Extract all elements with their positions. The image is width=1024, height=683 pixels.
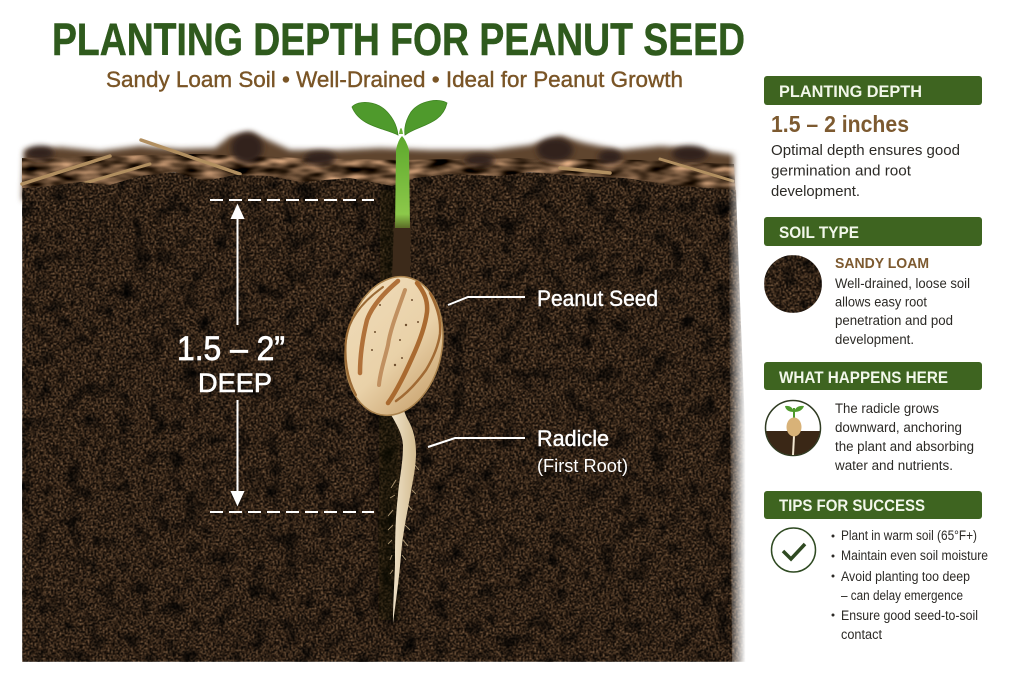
- soil description: Well-drained, loose soil: [835, 276, 970, 291]
- description: the plant and absorbing: [835, 439, 974, 454]
- tips list: Avoid planting too deep: [841, 569, 970, 584]
- panel: tips for success: [764, 491, 988, 642]
- front soil block: [22, 172, 746, 662]
- soil back surface: [22, 132, 736, 200]
- panel: what happens here: [764, 362, 982, 473]
- body text: development.: [771, 183, 860, 200]
- label: peanut seed: Peanut Seed: [537, 286, 658, 311]
- tips list: [832, 528, 988, 642]
- panel: tips for success: TIPS FOR SUCCESS: [779, 496, 925, 515]
- leader line: [428, 438, 525, 447]
- header bar: [764, 491, 982, 519]
- seed specks: [371, 299, 419, 366]
- soil description: development.: [835, 332, 914, 347]
- description: water and nutrients.: [834, 458, 953, 473]
- description: The radicle grows: [835, 401, 939, 416]
- peanut seed: [334, 268, 454, 424]
- body text: germination and root: [771, 162, 912, 180]
- label: peanut seed: [448, 286, 658, 311]
- depth label: [177, 330, 285, 398]
- dashed depth lines: [210, 200, 374, 512]
- root hairs: [388, 465, 419, 574]
- center bud: [399, 128, 403, 134]
- icon: mini seedling: [764, 400, 822, 459]
- tips list: contact: [841, 627, 882, 642]
- depth label: DEEP: [198, 368, 272, 398]
- header bar: [764, 76, 982, 105]
- soil description: [835, 276, 970, 347]
- soil clods: [26, 133, 708, 166]
- title: PLANTING DEPTH FOR PEANUT SEED: [52, 14, 745, 65]
- panel: planting depth: [764, 76, 982, 200]
- right leaf: [405, 100, 447, 135]
- subtitle: Sandy Loam Soil • Well-Drained • Ideal for Peanut Growth: [106, 67, 683, 92]
- seedling: [334, 100, 454, 623]
- icon: soil sample: [764, 255, 822, 313]
- panel: planting depth: 1.5 – 2 inches: [771, 111, 909, 137]
- label: radicle: Radicle: [537, 426, 609, 451]
- radicle: [386, 403, 416, 623]
- soil right edge fade: [728, 150, 750, 665]
- panel: soil type: SANDY LOAM: [835, 255, 929, 272]
- depth marker: [177, 200, 374, 512]
- soil description: allows easy root: [835, 294, 927, 310]
- body text: [771, 142, 960, 200]
- panel: soil type: SOIL TYPE: [779, 223, 859, 242]
- description: [834, 401, 974, 473]
- label: radicle: [428, 426, 628, 476]
- up arrow: [232, 206, 243, 325]
- seed channel shadow: [378, 190, 400, 620]
- panel: what happens here: WHAT HAPPENS HERE: [779, 368, 948, 387]
- stem: [395, 136, 410, 228]
- body text: Optimal depth ensures good: [771, 142, 960, 159]
- down arrow: [232, 400, 243, 504]
- depth label: 1.5 – 2”: [177, 330, 285, 368]
- header bar: [764, 362, 982, 390]
- panel: planting depth: PLANTING DEPTH: [779, 82, 922, 101]
- straw pieces: [22, 140, 733, 188]
- soil cross-section: [22, 132, 750, 665]
- stem below soil: [392, 222, 411, 278]
- tips list: Plant in warm soil (65°F+): [841, 528, 977, 543]
- panel: soil type: [764, 217, 982, 347]
- icon: check mark: [772, 528, 816, 572]
- description: downward, anchoring: [835, 420, 962, 435]
- label: radicle: (First Root): [537, 456, 628, 476]
- header bar: [764, 217, 982, 246]
- tips list: – can delay emergence: [841, 588, 963, 603]
- left leaf: [352, 102, 398, 135]
- tips list: Maintain even soil moisture: [841, 548, 988, 563]
- soil description: penetration and pod: [835, 313, 953, 328]
- tips list: Ensure good seed-to-soil: [841, 608, 978, 623]
- leader line: [448, 297, 525, 305]
